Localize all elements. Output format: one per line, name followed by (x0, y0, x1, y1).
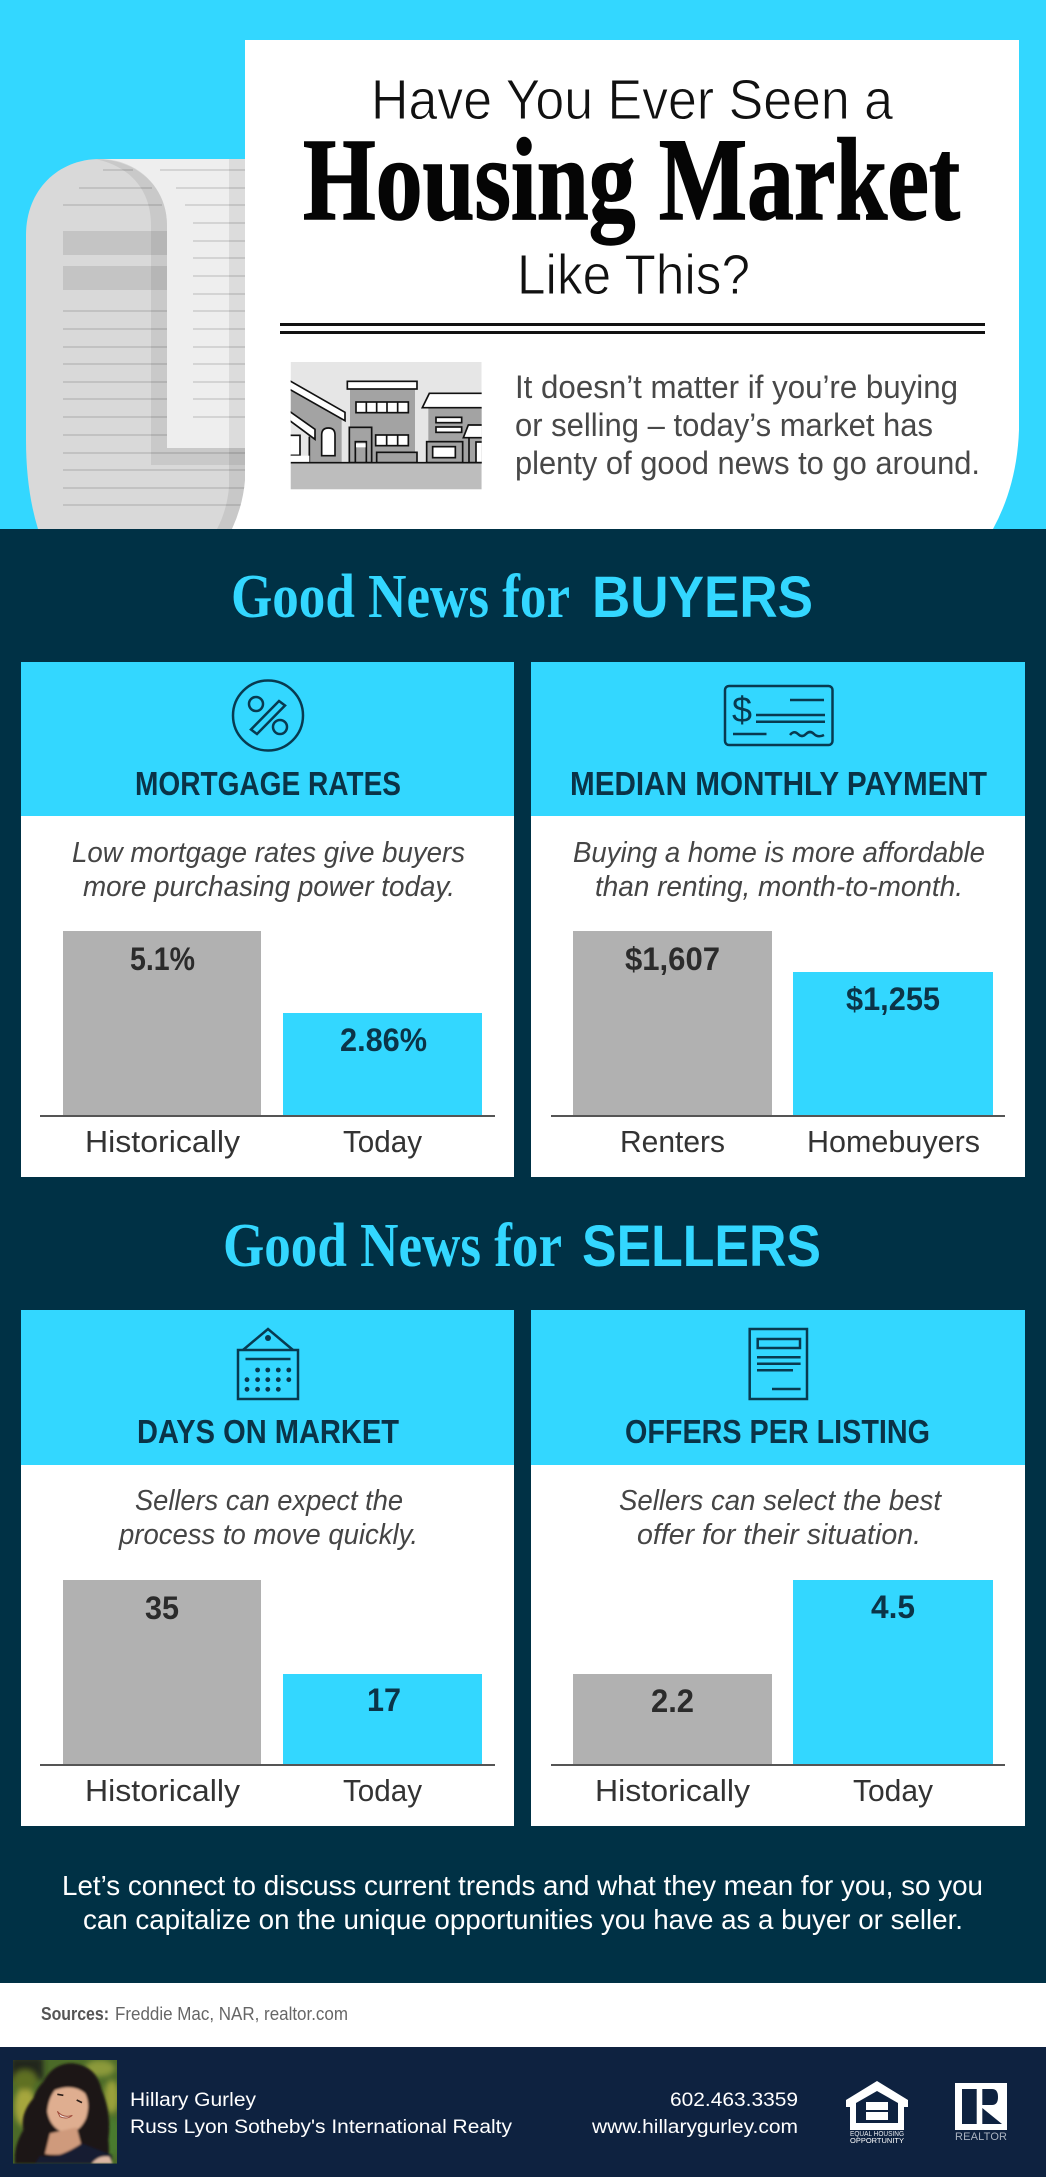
bar chart: mortgage rates: 2.86% (340, 1022, 427, 1058)
heading: median monthly payment: MEDIAN MONTHLY PAYMENT (570, 765, 987, 802)
bar chart: monthly payment: $1,607 (625, 941, 720, 977)
bar chart: monthly payment (551, 931, 1005, 1159)
text: days description (118, 1485, 418, 1551)
illustration: street of buildings (287, 362, 487, 489)
logo: equal housing opportunity: OPPORTUNITY (850, 2136, 904, 2145)
text: offers description (619, 1485, 943, 1551)
bar chart: offers per listing: 2.2 (651, 1683, 694, 1719)
text block: closing message: Let’s connect to discuss current trends and what they mean for you, so you (62, 1870, 983, 1901)
icon: offer document (750, 1329, 807, 1399)
text: offers description: Sellers can select the best (619, 1485, 943, 1517)
heading: good news for buyers: BUYERS (592, 565, 813, 630)
logo: realtor (955, 2083, 1007, 2143)
text: payment description: Buying a home is more affordable (573, 837, 985, 869)
bar chart: days on market: 35 (145, 1590, 179, 1626)
text: payment description: than renting, month-to-month. (595, 871, 963, 903)
divider: double rule (280, 323, 985, 334)
panel: sources band: Sources: (41, 2004, 109, 2024)
logo: realtor: REALTOR (955, 2131, 1007, 2143)
panel: sources band: Freddie Mac, NAR, realtor.com (115, 2004, 348, 2024)
text block: intro paragraph (515, 369, 980, 481)
bar chart: mortgage rates: 5.1% (130, 941, 195, 977)
text block: intro paragraph: or selling – today’s market has (515, 407, 933, 443)
bar chart: offers per listing: Historically (595, 1774, 751, 1808)
icon: percent sign (233, 680, 303, 750)
bar chart: monthly payment: Renters (620, 1125, 725, 1159)
heading: good news for sellers: Good News for (223, 1212, 562, 1280)
heading: good news for sellers: SELLERS (582, 1214, 821, 1279)
text block: intro paragraph: plenty of good news to go around. (515, 445, 980, 481)
text: agent name and brokerage: Hillary Gurley (130, 2090, 257, 2111)
title: main heading (303, 68, 960, 307)
heading: offers per listing: OFFERS PER LISTING (625, 1413, 930, 1450)
text block: intro paragraph: It doesn’t matter if you’re buying (515, 369, 958, 405)
text: agent name and brokerage: Russ Lyon Sotheby's International Realty (130, 2117, 513, 2138)
text: days description: process to move quickly. (118, 1519, 418, 1551)
text block: closing message (62, 1870, 983, 1935)
text: agent contact: www.hillarygurley.com (591, 2117, 798, 2138)
text: offers description: offer for their situation. (637, 1519, 921, 1551)
text: mortgage description: more purchasing power today. (83, 871, 455, 903)
text: agent contact: 602.463.3359 (670, 2090, 798, 2111)
text: mortgage description: Low mortgage rates give buyers (72, 837, 465, 869)
text: agent contact (591, 2090, 798, 2138)
text: agent name and brokerage (130, 2090, 513, 2138)
bar chart: days on market: 17 (367, 1682, 401, 1718)
heading: days on market: DAYS ON MARKET (137, 1413, 399, 1450)
heading: good news for sellers (223, 1212, 821, 1280)
title: main heading: Like This? (517, 243, 750, 307)
bar chart: monthly payment: $1,255 (846, 981, 940, 1017)
background: dark navy body (0, 529, 1046, 1983)
bar chart: offers per listing (551, 1580, 1005, 1808)
panel: days on market (21, 1310, 514, 1826)
photo: agent portrait (10, 2057, 121, 2164)
illustration: rolled newspaper (26, 159, 245, 529)
bar chart: mortgage rates: Historically (85, 1125, 241, 1159)
bar chart: offers per listing: 4.5 (871, 1589, 915, 1625)
bar chart: days on market: Today (343, 1774, 423, 1808)
panel: offers per listing (531, 1310, 1025, 1826)
icon: hanging calendar (238, 1329, 298, 1399)
heading: good news for buyers (231, 563, 813, 631)
heading: mortgage rates: MORTGAGE RATES (135, 765, 401, 802)
bar chart: monthly payment: Homebuyers (807, 1125, 980, 1159)
background: cyan header band (0, 0, 1046, 529)
bar chart: mortgage rates (40, 931, 495, 1159)
icon: bank check: $ (732, 689, 752, 730)
text block: closing message: can capitalize on the unique opportunities you have as a buyer or seller. (83, 1904, 963, 1935)
panel: white newspaper page (232, 40, 1019, 529)
icon: bank check (725, 686, 832, 745)
bar chart: days on market: Historically (85, 1774, 241, 1808)
panel: agent footer (0, 2047, 1046, 2177)
text: mortgage description (72, 837, 465, 903)
title: main heading: Have You Ever Seen a (371, 68, 893, 132)
bar chart: days on market (40, 1580, 495, 1808)
bar chart: mortgage rates: Today (343, 1125, 423, 1159)
panel: sources band (0, 1983, 1046, 2047)
bar chart: offers per listing: Today (853, 1774, 934, 1808)
panel: median monthly payment (531, 662, 1025, 1177)
logo: equal housing opportunity (846, 2081, 908, 2145)
panel: mortgage rates (21, 662, 514, 1177)
text: payment description (573, 837, 985, 903)
heading: good news for buyers: Good News for (231, 563, 570, 631)
logo: equal housing opportunity: EQUAL HOUSING (850, 2129, 904, 2138)
text: days description: Sellers can expect the (135, 1485, 403, 1517)
